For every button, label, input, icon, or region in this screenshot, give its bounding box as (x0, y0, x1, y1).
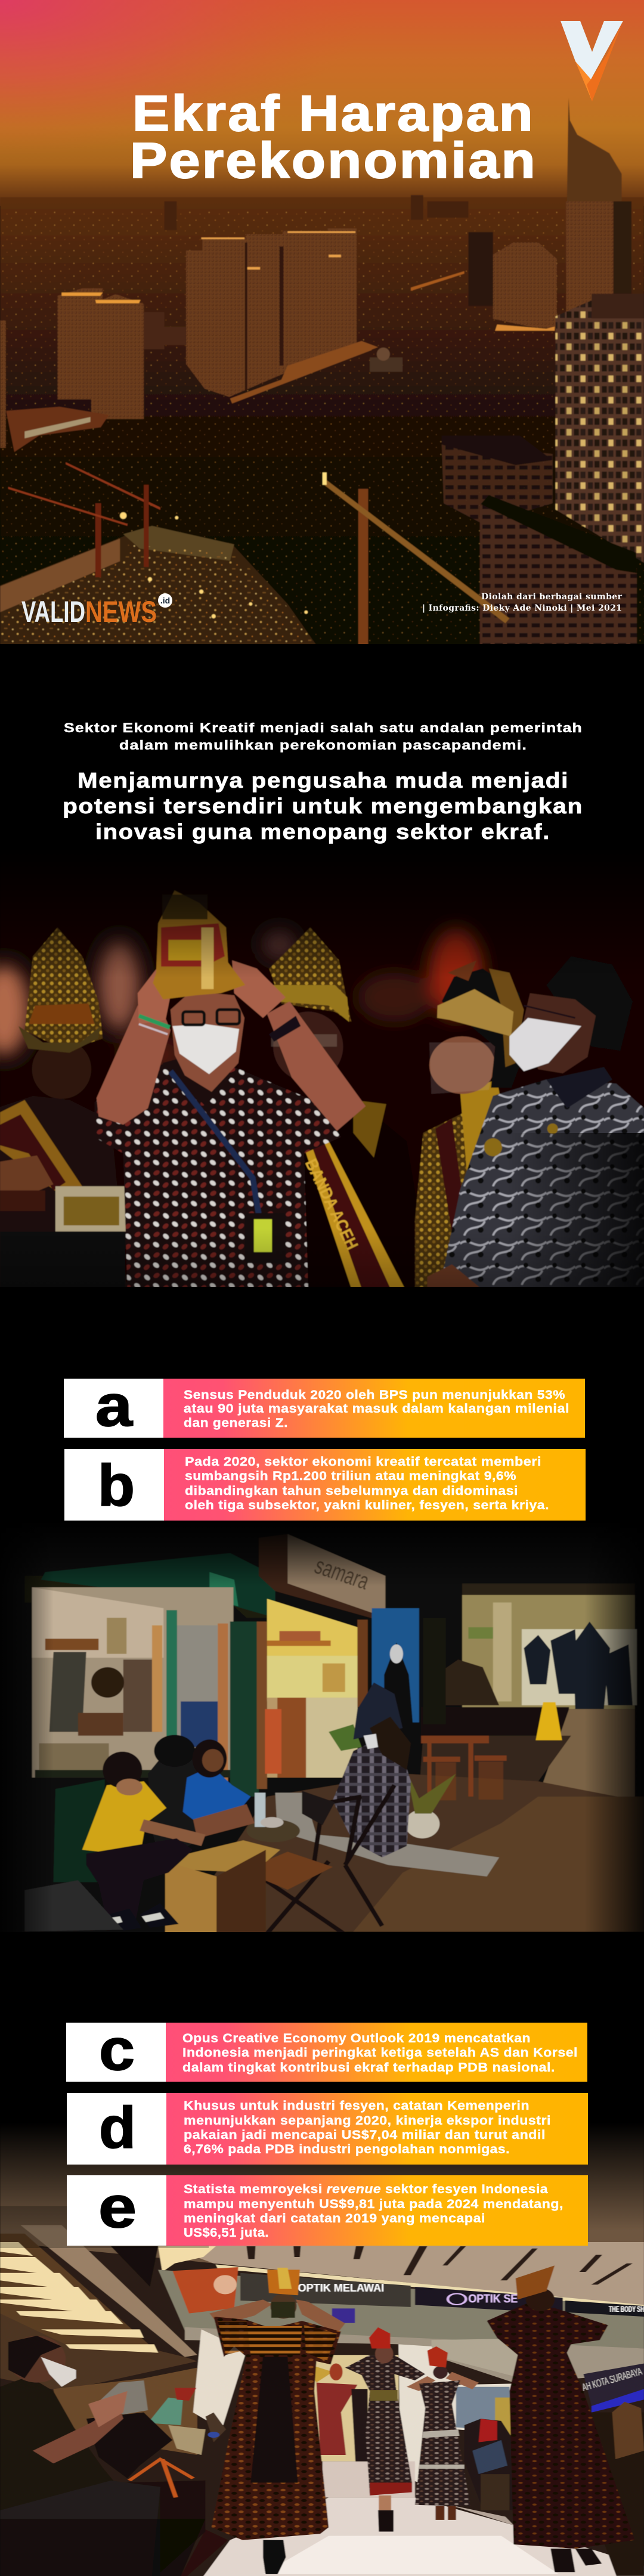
near right tower (556, 300, 644, 563)
highlight paragraph: inovasi guna menopang sektor ekraf. (95, 819, 550, 844)
green shop frame (20, 1576, 275, 1618)
badge c (66, 2017, 166, 2082)
distant buildings (165, 195, 468, 230)
balcony glass (158, 2270, 644, 2348)
VALIDNEWS logo: .id (160, 596, 170, 605)
text b: dibandingkan tahun sebelumnya dan didominasi (185, 1484, 518, 1498)
yellow cafe room (267, 1599, 357, 1699)
callout e (67, 2174, 588, 2246)
right official (428, 956, 644, 1288)
white step (275, 1792, 499, 1877)
text c (166, 2023, 587, 2082)
corridor people (524, 1621, 633, 1709)
BNI tower (567, 98, 621, 203)
photo fades (0, 1521, 644, 1932)
VALIDNEWS logo: NEWS (85, 595, 157, 628)
text a: Sensus Penduduk 2020 oleh BPS pun menunjukkan 53% (184, 1388, 565, 1402)
woman plaid (333, 1739, 411, 1857)
crate (165, 1840, 280, 1872)
badge e (67, 2174, 167, 2246)
young people (148, 1744, 209, 1861)
badge d (67, 2093, 167, 2165)
text a: dan generasi Z. (184, 1416, 288, 1430)
panel: hero city photo with title (0, 0, 644, 645)
blue room with mural (372, 1608, 419, 1722)
highlight paragraph (63, 768, 583, 844)
sunset sky (0, 0, 644, 206)
text d: Khusus untuk industri fesyen, catatan Kemenperin (184, 2099, 530, 2113)
upper ceiling above panels (0, 2123, 644, 2306)
main figure: minister (94, 890, 366, 1289)
road and mosque (411, 271, 465, 291)
badge a: a (95, 1373, 134, 1438)
seated man back (354, 1682, 402, 1739)
city skyline photo (0, 98, 644, 645)
floor (177, 1774, 644, 1931)
seated in corridor (442, 1659, 499, 1705)
badge d: d (99, 2095, 136, 2160)
callout d (67, 2093, 588, 2165)
text b (164, 1449, 586, 1521)
source credit (422, 592, 623, 613)
callout c (66, 2017, 587, 2082)
far model (306, 2363, 368, 2462)
source credit: Diolah dari berbagai sumber (481, 592, 623, 602)
source credit: | Infografis: Dieky Ade Ninoki | Mei 2021 (422, 603, 622, 613)
photo: creative shops and cafe (0, 1521, 644, 1937)
optik lettering (298, 2281, 644, 2314)
wet floor sign (535, 1702, 562, 1740)
bottom right building (480, 505, 637, 645)
text e (166, 2175, 588, 2246)
highlight paragraph: potensi tersendiri untuk mengembangkan (63, 794, 583, 818)
left pavement (17, 1880, 123, 1931)
photo fades (0, 847, 644, 1287)
intro paragraph (64, 720, 583, 753)
front man (0, 2336, 160, 2576)
clothing shop window (32, 1587, 233, 1778)
text b: oleh tiga subsektor, yakni kuliner, fesyen, serta kriya. (185, 1498, 549, 1512)
white banners (193, 2329, 246, 2429)
text e: Statista memroyeksi revenue sektor fesyen Indonesia (184, 2182, 548, 2196)
left attendant (0, 927, 128, 1293)
title: Ekraf Harapan (132, 85, 535, 141)
badge b: b (98, 1453, 135, 1518)
title: Perekonomian (130, 132, 537, 188)
stage steps (421, 1707, 569, 1736)
ceiling strip lights (0, 2234, 158, 2353)
text b: sumbangsih Rp1.200 triliun atau meningkat 9,6% (185, 1469, 516, 1483)
intro paragraph: Sektor Ekonomi Kreatif menjadi salah satu andalan pemerintah (64, 720, 583, 735)
photo: minister wearing Aceh headdress (0, 890, 644, 1287)
optik lettering: OPTIK SE (468, 2292, 518, 2306)
badge c: c (99, 2017, 135, 2082)
title (133, 93, 532, 179)
photo fades (0, 2123, 644, 2248)
text d: pakaian jadi mencapai US$7,04 miliar dan turut andil (184, 2128, 546, 2142)
balcony lower wall (185, 2327, 644, 2383)
text a: atau 90 juta masyarakat masuk dalam kalangan milenial (184, 1402, 569, 1416)
callout b (64, 1449, 586, 1521)
round table with bottle (246, 1819, 300, 1842)
tables in back (421, 1736, 507, 1800)
stage and runway (323, 2462, 415, 2497)
highlight paragraph: Menjamurnya pengusaha muda menjadi (78, 768, 569, 792)
text e: mampu menyentuh US$9,81 juta pada 2024 mendatang, (184, 2197, 564, 2211)
VALIDNEWS logo (21, 593, 172, 623)
folding chairs (255, 1785, 394, 1937)
icon: V logo (561, 21, 623, 101)
bench (54, 1779, 105, 1882)
construction site (0, 526, 317, 645)
left towers (57, 289, 103, 400)
audience (86, 2380, 226, 2576)
text d: menunjukkan sepanjang 2020, kinerja ekspor industri (184, 2114, 551, 2128)
text e: US$6,51 juta. (184, 2226, 269, 2240)
right side audience (465, 2363, 644, 2576)
text c: dalam tingkat kontribusi ekraf terhadap PDB nasional. (182, 2061, 555, 2075)
right mid tower (493, 243, 557, 329)
text e: meningkat dari catatan 2019 yang mencapai (184, 2212, 485, 2225)
ceiling (156, 2242, 644, 2306)
photo: fashion show in mall (0, 2123, 644, 2576)
samara sign lettering: samara (311, 1552, 373, 1594)
optik lettering: OPTIK MELAWAI (298, 2281, 384, 2294)
ceiling spots (246, 2246, 633, 2284)
right model (487, 2265, 635, 2572)
central towers (186, 228, 357, 397)
callout a (64, 1373, 585, 1438)
badge b (64, 1449, 165, 1521)
intro text block (63, 720, 583, 844)
badge e: e (98, 2174, 137, 2240)
sash lettering: BANDA ACEH (301, 1156, 361, 1253)
intro paragraph: dalam memulihkan perekonomian pascapandemi. (119, 738, 527, 753)
text b: Pada 2020, sektor ekonomi kreatif tercatat memberi (185, 1455, 541, 1469)
text a (163, 1379, 585, 1438)
VALIDNEWS logo: VALID (21, 595, 85, 628)
lace dress model (407, 2346, 479, 2520)
right wall (462, 1595, 635, 1709)
middle model (345, 2327, 425, 2532)
text d (166, 2093, 588, 2165)
samara sign (287, 1534, 385, 1618)
bottom left shadow (0, 2519, 205, 2576)
badge a (64, 1373, 164, 1438)
text c: Opus Creative Economy Outlook 2019 mencatatkan (182, 2032, 531, 2045)
crane (358, 489, 368, 645)
shopfronts (240, 2273, 411, 2307)
low block (442, 442, 553, 524)
planters (405, 1810, 439, 1838)
text c: Indonesia menjadi peringkat ketiga setelah AS dan Korsel (182, 2046, 578, 2060)
stage glows (0, 927, 483, 1075)
main model (209, 2268, 345, 2574)
woman in crown (415, 961, 524, 1289)
text d: 6,76% pada PDB industri pengolahan nonmigas. (184, 2142, 510, 2156)
rear attendant (268, 927, 416, 1287)
